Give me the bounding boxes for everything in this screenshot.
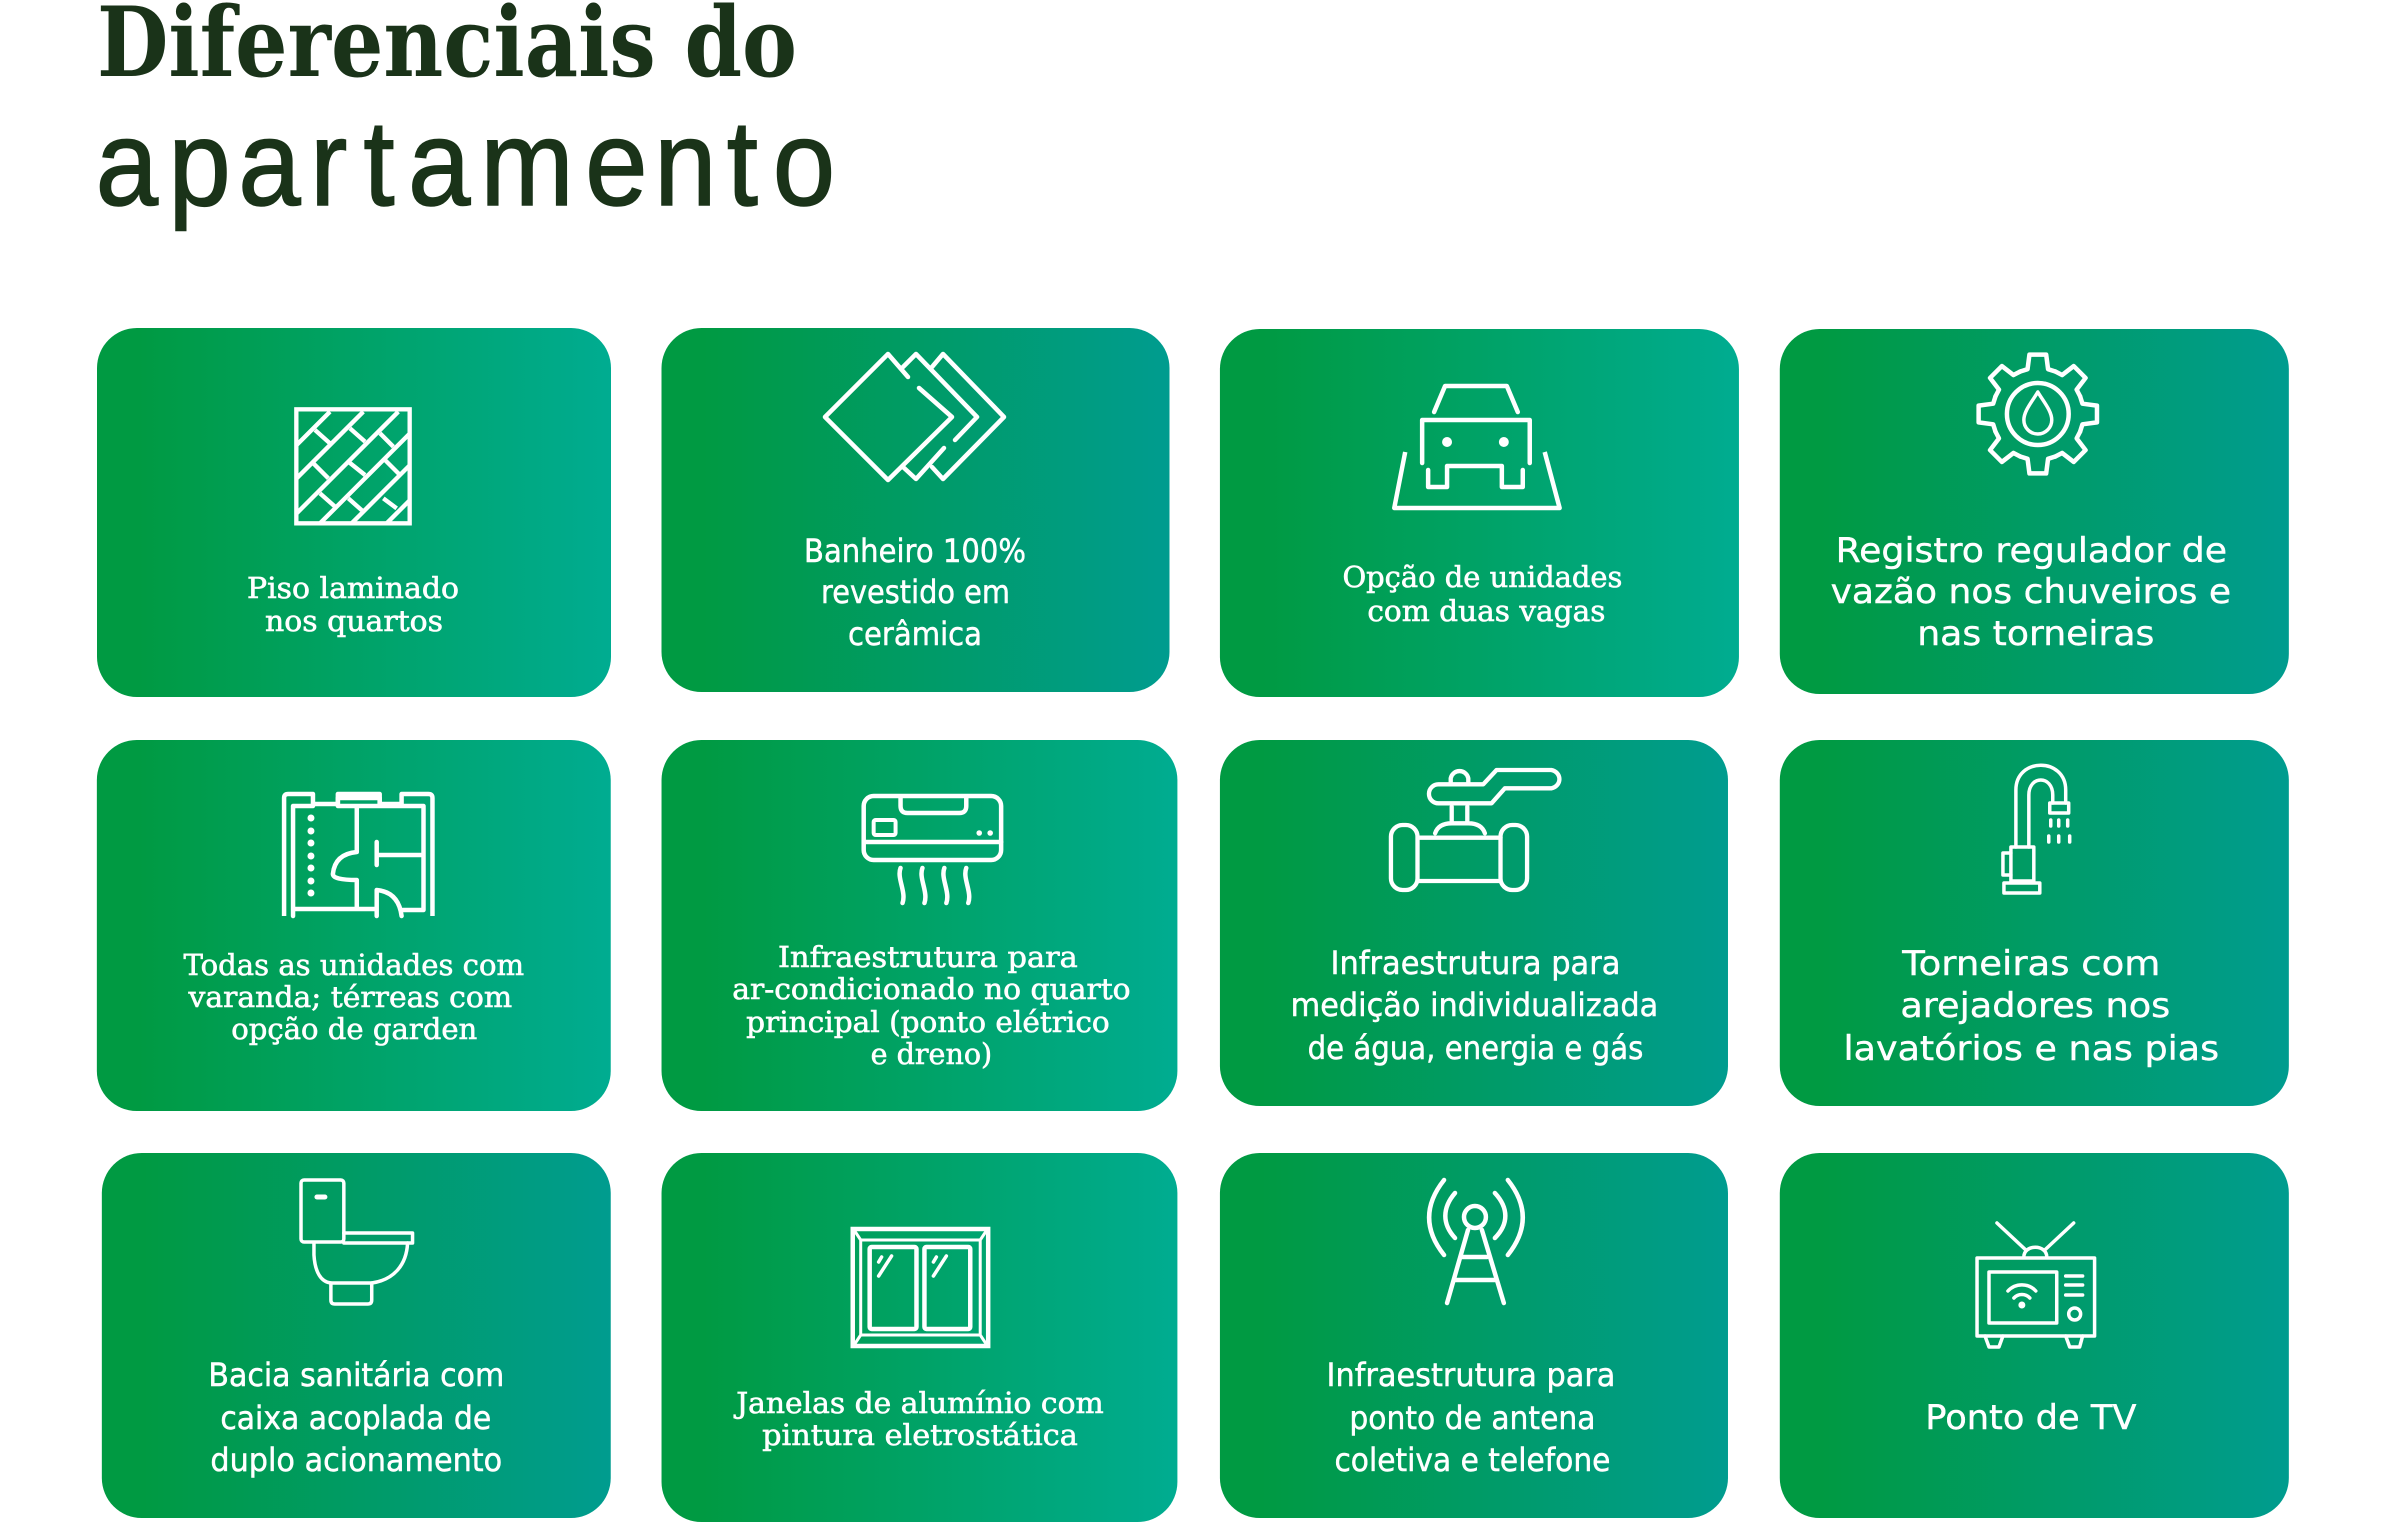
text: Bacia sanitária com: [208, 1356, 504, 1394]
text: medição individualizada: [1291, 986, 1658, 1024]
title: [96, 0, 835, 231]
icon: floor plan: [284, 794, 432, 916]
text: Infraestrutura para: [1327, 1356, 1615, 1394]
text: com duas vagas: [1367, 594, 1605, 628]
text: ar-condicionado no quarto: [732, 972, 1131, 1006]
text: varanda; térreas com: [187, 980, 512, 1014]
text: Banheiro 100%: [804, 532, 1026, 570]
icon: laminate floor: [296, 409, 410, 523]
icon: ball valve: [1391, 770, 1559, 890]
text: [1291, 944, 1658, 1067]
text: vazão nos chuveiros e: [1831, 573, 2231, 612]
text: Opção de unidades: [1342, 560, 1622, 594]
panel: bacia sanitária: [102, 1153, 611, 1518]
icon: car in parking space: [1394, 386, 1560, 508]
text: cerâmica: [848, 615, 982, 653]
icon: television: [1977, 1223, 2095, 1347]
text: coletiva e telefone: [1334, 1441, 1610, 1479]
text: nos quartos: [265, 604, 443, 638]
panel: torneiras: [1780, 740, 2289, 1106]
text: principal (ponto elétrico: [746, 1005, 1110, 1039]
text: [1342, 560, 1622, 628]
text: caixa acoplada de: [220, 1399, 491, 1437]
panel: banheiro: [662, 328, 1170, 692]
title: apartamento: [96, 95, 835, 231]
panel: antena e telefone: [1220, 1153, 1728, 1518]
text: Infraestrutura para: [778, 940, 1078, 974]
text: [804, 532, 1026, 653]
panel: duas vagas: [1220, 329, 1739, 697]
text: Janelas de alumínio com: [733, 1386, 1104, 1420]
text: ponto de antena: [1349, 1399, 1595, 1437]
text: e dreno): [871, 1037, 992, 1071]
panel: ponto de TV: [1780, 1153, 2289, 1518]
text: [247, 571, 459, 638]
panel: registro regulador: [1780, 329, 2289, 694]
icon: ceramic tiles: [825, 354, 1004, 480]
panel: medição individualizada: [1220, 740, 1728, 1106]
text: [1844, 945, 2219, 1069]
text: Torneiras com: [1901, 945, 2160, 984]
text: Infraestrutura para: [1331, 944, 1620, 982]
panel: varanda: [97, 740, 611, 1111]
icon: faucet: [2003, 765, 2070, 893]
text: Todas as unidades com: [183, 948, 524, 982]
icon: air conditioner: [864, 796, 1001, 903]
icon: antenna tower: [1429, 1180, 1523, 1303]
panel: ar-condicionado: [662, 740, 1177, 1111]
icon: toilet: [301, 1180, 413, 1304]
text: [183, 948, 524, 1046]
text: pintura eletrostática: [762, 1418, 1078, 1452]
text: [732, 940, 1131, 1071]
text: nas torneiras: [1917, 615, 2154, 654]
text: duplo acionamento: [210, 1441, 502, 1479]
text: Registro regulador de: [1836, 532, 2227, 571]
icon: gear with drop: [1979, 355, 2097, 473]
text: Piso laminado: [247, 571, 459, 605]
icon: window: [853, 1229, 988, 1346]
text: [1327, 1356, 1615, 1479]
text: de água, energia e gás: [1308, 1029, 1643, 1067]
text: [208, 1356, 504, 1479]
text: Ponto de TV: [1925, 1399, 2136, 1438]
text: [1831, 532, 2231, 654]
text: [733, 1386, 1104, 1452]
text: lavatórios e nas pias: [1844, 1030, 2219, 1069]
panel: janelas: [662, 1153, 1177, 1522]
text: revestido em: [821, 573, 1010, 611]
panel: piso laminado: [97, 328, 611, 697]
text: opção de garden: [231, 1012, 477, 1046]
text: arejadores nos: [1900, 987, 2170, 1026]
